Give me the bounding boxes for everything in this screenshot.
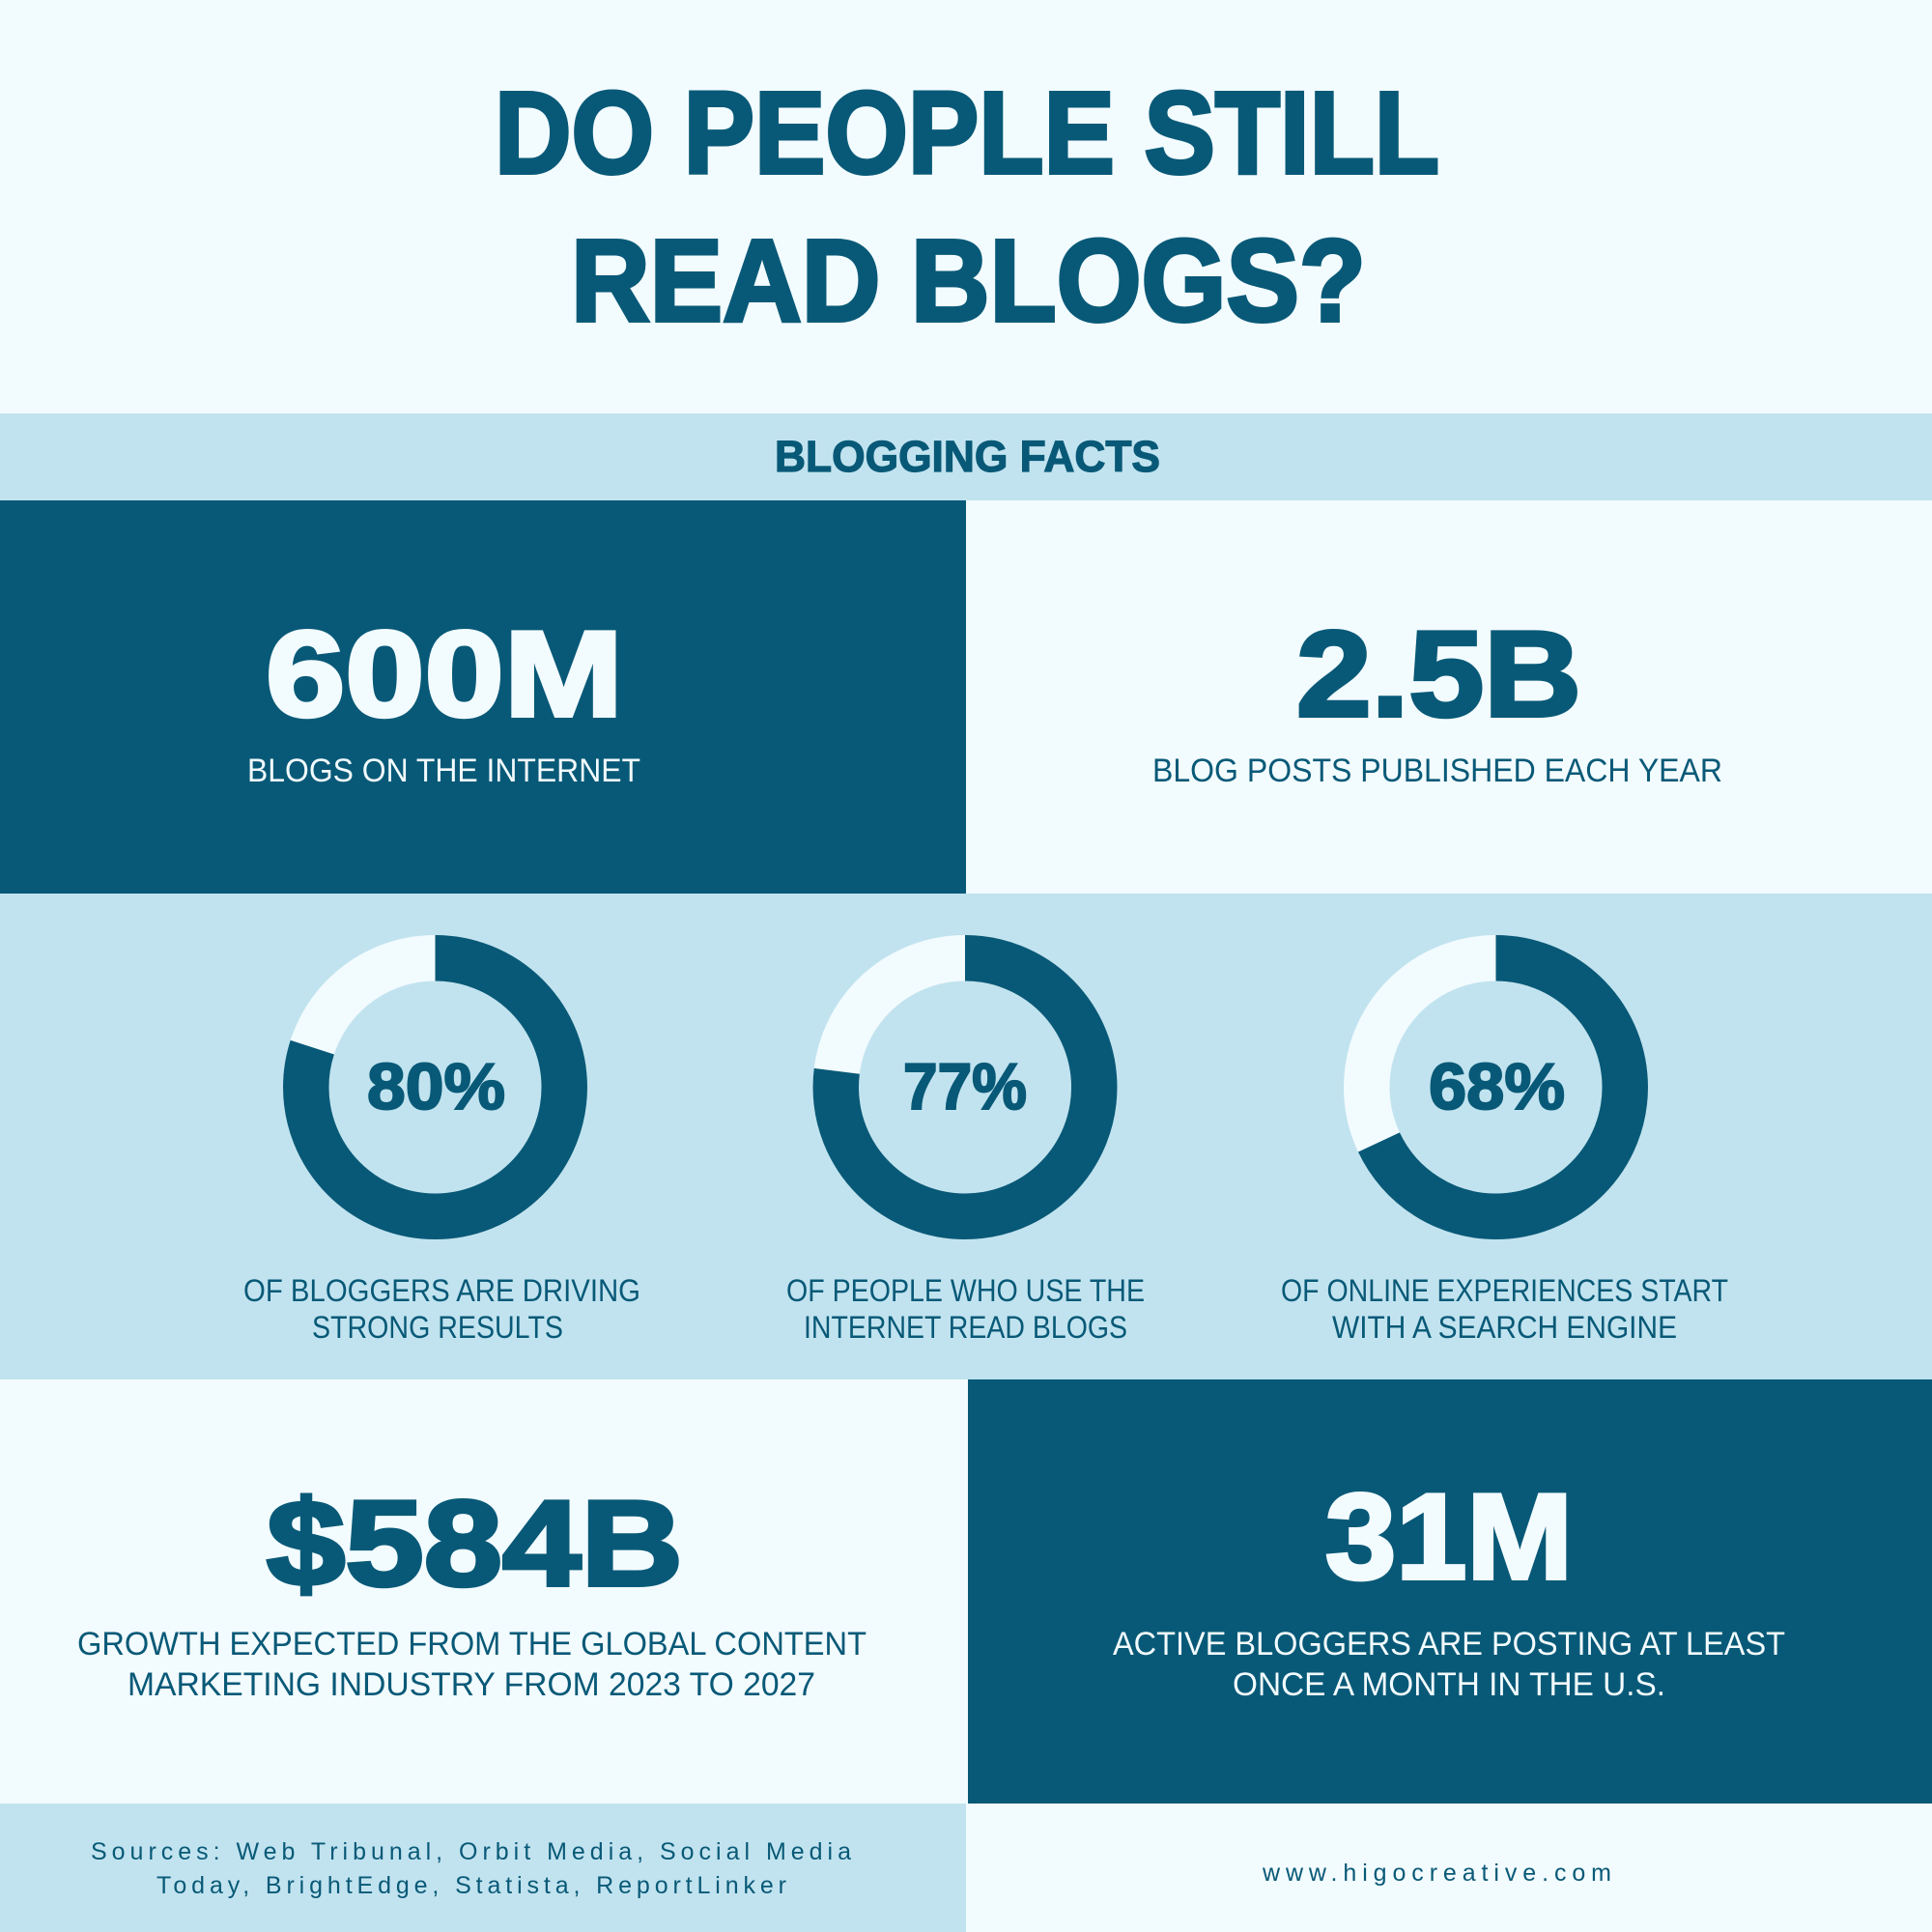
donut chart: 68% (1367, 958, 1625, 1216)
donut chart: 80%: 80% (367, 1050, 505, 1123)
title (495, 67, 1439, 346)
footer: sources: Today, BrightEdge, Statista, ReportLinker (156, 1872, 786, 1899)
donut chart: 80% (306, 958, 564, 1216)
caption: 80% bloggers: OF BLOGGERS ARE DRIVING (243, 1273, 640, 1308)
caption: 80% bloggers: STRONG RESULTS (312, 1310, 563, 1345)
caption: 77% readers: OF PEOPLE WHO USE THE (786, 1273, 1145, 1308)
stat: $584B: $584B (267, 1475, 683, 1611)
stat: 2.5B: 2.5B (1296, 606, 1581, 742)
caption: 68% search (1281, 1273, 1728, 1345)
section banner: blogging facts: BLOGGING FACTS (775, 432, 1160, 481)
donut chart: 77%: 77% (903, 1050, 1027, 1123)
caption: active bloggers: ONCE A MONTH IN THE U.S. (1233, 1666, 1665, 1703)
caption: 80% bloggers (243, 1273, 640, 1345)
panel: $584B growth (0, 1379, 968, 1804)
caption: 68% search: OF ONLINE EXPERIENCES START (1281, 1273, 1728, 1308)
title: DO PEOPLE STILL (495, 67, 1439, 198)
caption: blogs on the internet: BLOGS ON THE INTERNET (247, 753, 640, 789)
caption: content marketing growth: GROWTH EXPECTED FROM THE GLOBAL CONTENT (77, 1626, 867, 1662)
footer: sources (0, 1804, 966, 1932)
footer: sources: Sources: Web Tribunal, Orbit Media, Social Media (91, 1838, 851, 1865)
caption: 77% readers (786, 1273, 1145, 1345)
caption: active bloggers: ACTIVE BLOGGERS ARE POSTING AT LEAST (1113, 1626, 1785, 1662)
panel: 600M blogs (0, 500, 966, 894)
title: READ BLOGS? (571, 214, 1366, 346)
section banner: blogging facts (0, 413, 1932, 500)
stat: 600M: 600M (266, 606, 623, 742)
caption: active bloggers (1113, 1626, 1785, 1703)
panel: 2.5B posts (966, 500, 1932, 894)
caption: 77% readers: INTERNET READ BLOGS (804, 1310, 1127, 1345)
donut chart: 77% (836, 958, 1094, 1216)
caption: content marketing growth: MARKETING INDUSTRY FROM 2023 TO 2027 (128, 1666, 815, 1703)
panel: donut charts (0, 894, 1932, 1379)
caption: content marketing growth (77, 1626, 867, 1703)
caption: 68% search: WITH A SEARCH ENGINE (1332, 1310, 1677, 1345)
footer: website: www.higocreative.com (1262, 1860, 1611, 1887)
caption: blog posts published: BLOG POSTS PUBLISHED EACH YEAR (1152, 753, 1722, 789)
panel: 31M bloggers (968, 1379, 1932, 1804)
stat: 31M: 31M (1325, 1468, 1573, 1605)
footer: website (966, 1804, 1932, 1932)
donut chart: 68%: 68% (1429, 1050, 1565, 1123)
